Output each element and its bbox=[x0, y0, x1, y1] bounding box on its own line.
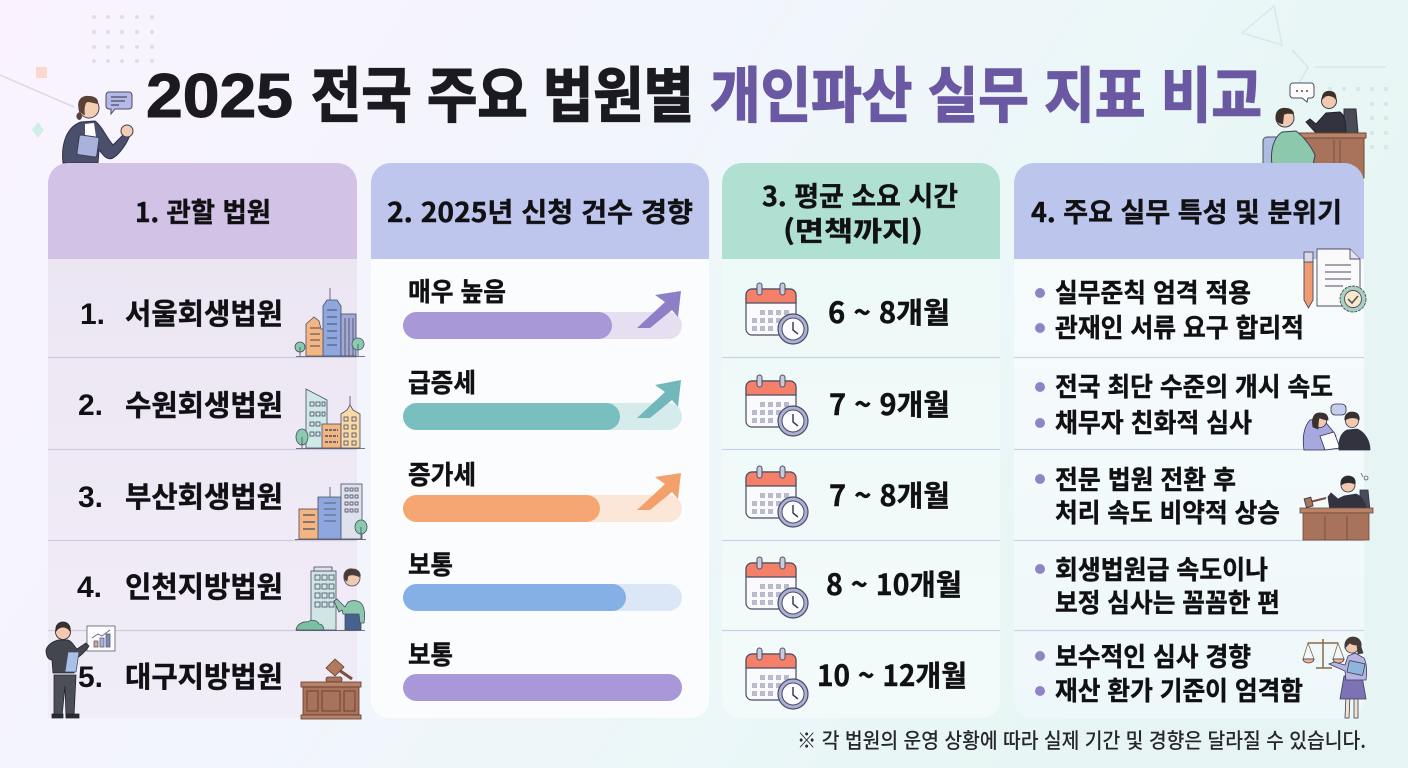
practice row 1: 실무준칙 엄격 적용 bbox=[1055, 273, 1251, 310]
row: Incheon court: 인천지방법원 bbox=[125, 564, 283, 606]
duration row 5 bbox=[746, 648, 967, 709]
practice row 2: 전국 최단 수준의 개시 속도 bbox=[1055, 367, 1333, 404]
icon: Daegu gavel and bench bbox=[301, 659, 361, 719]
column 3 body bbox=[722, 250, 1000, 718]
duration row 5: 10 ~ 12개월 bbox=[817, 653, 967, 695]
row: Daegu court: 5. bbox=[78, 661, 103, 694]
title bbox=[146, 48, 1262, 135]
column 2 body bbox=[371, 250, 709, 718]
column 2 header bbox=[371, 163, 709, 259]
illustration: woman with scales bbox=[1303, 637, 1367, 718]
column 4 header bbox=[1014, 163, 1364, 259]
decoration: top-right shapes and dots bbox=[1242, 6, 1388, 149]
column 4 row dividers bbox=[1014, 358, 1364, 630]
duration row 1: 6 ~ 8개월 bbox=[828, 290, 950, 332]
illustration: man with chart board bbox=[46, 622, 115, 718]
column 3 header: (면책까지) bbox=[783, 210, 923, 249]
practice row 1: 관재인 서류 요구 합리적 bbox=[1055, 308, 1304, 345]
illustration: presenter woman with speech bubble bbox=[63, 92, 133, 163]
column 1 header bbox=[48, 163, 357, 259]
panel: column 1 courts bbox=[48, 163, 357, 718]
illustration: judge at bench bbox=[1300, 473, 1373, 540]
icon: Busan buildings bbox=[295, 484, 367, 540]
icon: Seoul buildings bbox=[295, 288, 365, 356]
panel: column 4 practice characteristics bbox=[1014, 163, 1364, 718]
panel: column 2 filing trends bbox=[371, 163, 709, 718]
column 4 body bbox=[1014, 250, 1364, 718]
panel: column 3 average duration bbox=[722, 163, 1000, 718]
trend: increasing bbox=[403, 455, 682, 522]
duration row 1 bbox=[746, 283, 950, 344]
practice row 3: 전문 법원 전환 후 bbox=[1055, 460, 1236, 497]
duration row 4: 8 ~ 10개월 bbox=[826, 562, 962, 604]
duration row 2 bbox=[746, 375, 950, 436]
row: Busan court: 부산회생법원 bbox=[125, 474, 283, 516]
trend: moderate, Incheon: 보통 bbox=[408, 545, 453, 582]
trend: surging bbox=[403, 363, 682, 430]
row: Suwon court: 2. bbox=[78, 389, 103, 422]
row: Suwon court: 수원회생법원 bbox=[125, 382, 283, 424]
practice row 1 bbox=[1035, 273, 1304, 345]
practice row 2 bbox=[1035, 367, 1333, 440]
icon: Suwon buildings bbox=[296, 389, 365, 448]
row: Seoul court: 1. bbox=[80, 298, 105, 331]
trend: increasing: 증가세 bbox=[408, 455, 476, 492]
practice row 4 bbox=[1035, 550, 1280, 620]
decoration: top-left dots and shapes bbox=[0, 15, 154, 138]
trend: very high: 매우 높음 bbox=[408, 272, 506, 309]
practice row 3 bbox=[1035, 460, 1280, 530]
practice row 4: 보정 심사는 꼼꼼한 편 bbox=[1055, 583, 1280, 620]
icon: document with pen and badge bbox=[1304, 249, 1366, 312]
trend: very high bbox=[403, 272, 682, 339]
row: Daegu court: 대구지방법원 bbox=[125, 654, 283, 696]
illustration: consultation pair bbox=[1303, 404, 1370, 450]
title: 전국 주요 법원별 bbox=[311, 48, 694, 135]
trend: moderate, Incheon bbox=[403, 545, 682, 611]
practice row 5 bbox=[1035, 637, 1303, 708]
practice row 5: 재산 환가 기준이 엄격함 bbox=[1055, 671, 1303, 708]
trend: moderate, Daegu: 보통 bbox=[408, 635, 453, 672]
footnote: ※ 각 법원의 운영 상황에 따라 실제 기간 및 경향은 달라질 수 있습니다. bbox=[797, 725, 1366, 755]
illustration: judge and client at the bench bbox=[1263, 83, 1366, 178]
column 3 header: 3. 평균 소요 시간 bbox=[762, 175, 958, 214]
title: 2025 bbox=[146, 62, 293, 131]
practice row 4: 회생법원급 속도이나 bbox=[1055, 550, 1268, 587]
column 1 body bbox=[48, 250, 357, 718]
column 2 header: 2. 2025년 신청 건수 경향 bbox=[387, 191, 693, 230]
row: Seoul court: 서울회생법원 bbox=[125, 291, 283, 333]
column 3 header bbox=[722, 163, 1000, 259]
column 1 row dividers bbox=[48, 358, 357, 630]
row: Incheon court: 4. bbox=[77, 571, 102, 604]
duration row 3: 7 ~ 8개월 bbox=[829, 473, 950, 515]
duration row 3 bbox=[746, 466, 950, 527]
title: 개인파산 실무 지표 비교 bbox=[710, 48, 1262, 135]
duration row 4 bbox=[746, 557, 962, 618]
duration row 2: 7 ~ 9개월 bbox=[829, 382, 950, 424]
practice row 3: 처리 속도 비약적 상승 bbox=[1055, 493, 1280, 530]
trend: surging: 급증세 bbox=[408, 363, 476, 400]
icon: Incheon building and man bbox=[296, 567, 365, 630]
practice row 2: 채무자 친화적 심사 bbox=[1055, 403, 1252, 440]
practice row 5: 보수적인 심사 경향 bbox=[1055, 637, 1251, 674]
column 4 header: 4. 주요 실무 특성 및 분위기 bbox=[1031, 191, 1342, 230]
trend: moderate, Daegu bbox=[403, 635, 682, 701]
column 3 row dividers bbox=[722, 358, 1000, 630]
column 1 header: 1. 관할 법원 bbox=[135, 191, 271, 230]
row: Busan court: 3. bbox=[78, 481, 103, 514]
